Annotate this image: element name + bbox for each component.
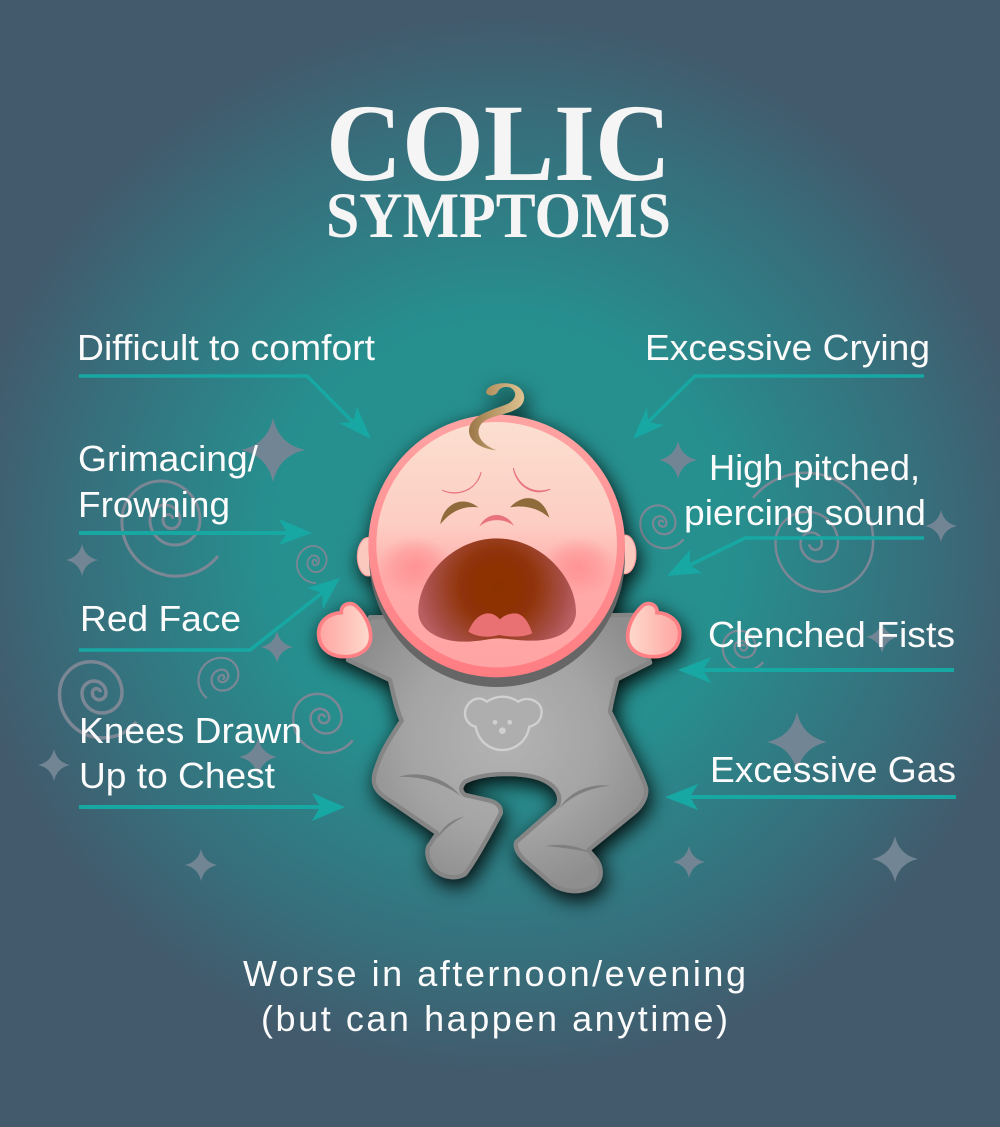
ears (357, 535, 636, 576)
baby (319, 383, 680, 891)
title: colic: COLIC (326, 82, 671, 204)
decorative stars (38, 418, 957, 882)
label: high pitched, piercing sound: High pitched, (709, 447, 920, 488)
open crying mouth (418, 538, 576, 642)
arrow: excessive gas (665, 784, 956, 810)
footer note: Worse in afternoon/evening (243, 953, 746, 994)
footer note: (but can happen anytime) (261, 998, 728, 1039)
hair curl (469, 383, 524, 450)
arrow: clenched fists (678, 657, 954, 683)
label: knees drawn up to chest: Up to Chest (79, 755, 275, 796)
head shadow crescent (369, 425, 625, 687)
right hand (628, 604, 680, 657)
label: grimacing / frowning: Frowning (78, 484, 230, 525)
bear emblem (465, 697, 542, 750)
label: difficult to comfort: Difficult to comfort (77, 327, 375, 368)
left cheek blush (377, 536, 453, 597)
arrow: excessive crying (633, 376, 924, 439)
label: excessive crying: Excessive Crying (645, 327, 930, 368)
arrow: difficult to comfort (79, 376, 371, 439)
eyebrows (442, 468, 550, 493)
label: high pitched, piercing sound: piercing sound (684, 492, 926, 533)
decorative spirals (60, 473, 873, 753)
left hand (319, 604, 371, 657)
baby body (348, 615, 650, 891)
knee and foot creases (398, 774, 611, 853)
arrow: red face (79, 578, 340, 650)
label: clenched fists: Clenched Fists (708, 614, 955, 655)
face skin (376, 422, 617, 667)
label: knees drawn up to chest: Knees Drawn (79, 710, 302, 751)
head outline (368, 415, 625, 677)
arrow: high pitched (667, 538, 924, 576)
label: high pitched, piercing sound (684, 447, 926, 533)
right cheek blush (540, 536, 617, 597)
footer note (243, 953, 746, 1039)
nose (479, 515, 514, 527)
label: grimacing / frowning (78, 438, 258, 525)
arrow: grimacing (79, 519, 312, 545)
title (326, 82, 671, 252)
label: red face: Red Face (80, 598, 241, 639)
closed eyes (440, 498, 549, 524)
title: symptoms: SYMPTOMS (326, 180, 671, 252)
label: grimacing / frowning: Grimacing/ (78, 438, 258, 479)
head (368, 383, 625, 677)
tongue (468, 613, 532, 637)
label: knees drawn up to chest (79, 710, 302, 796)
label: excessive gas: Excessive Gas (710, 749, 956, 790)
arrow: knees drawn (79, 793, 345, 821)
